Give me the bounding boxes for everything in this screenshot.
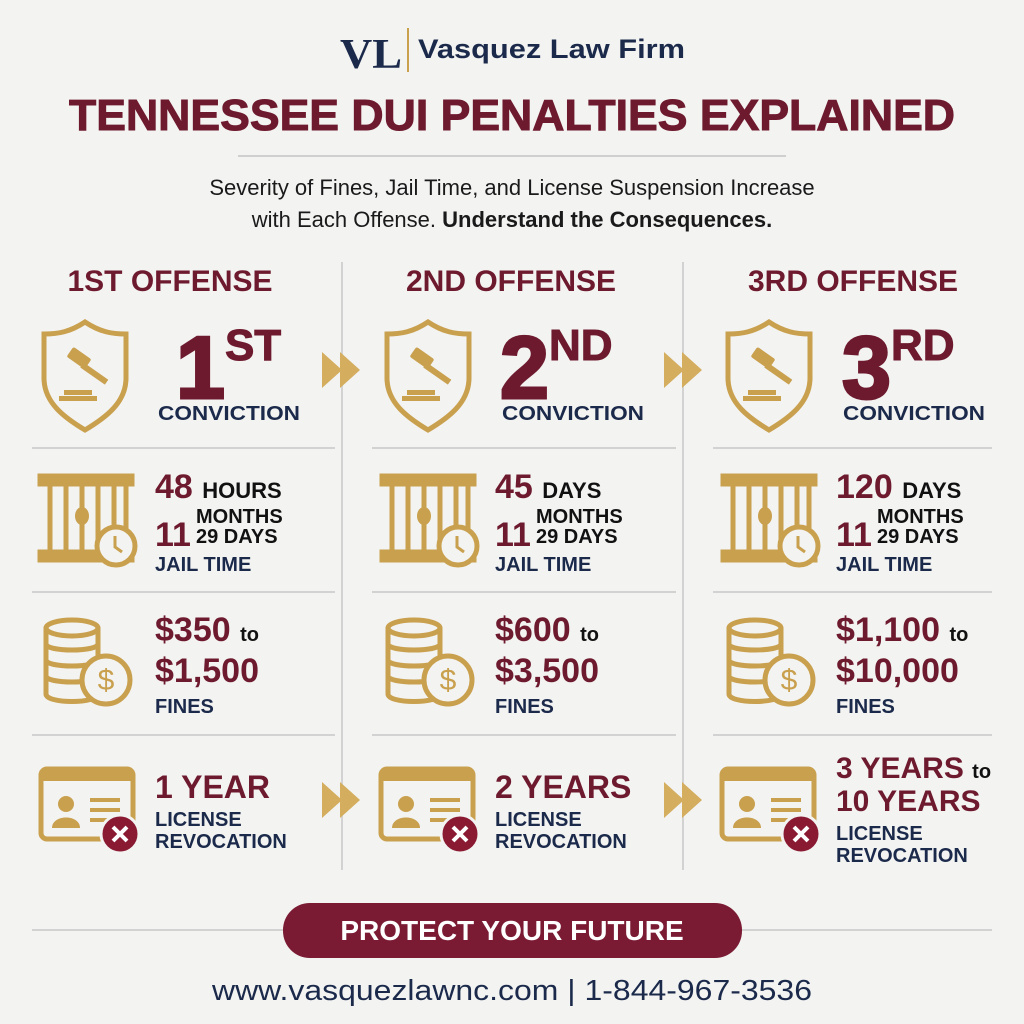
subtitle: with Each Offense. Understand the Consequences. [251, 207, 772, 232]
panel: 2nd offense: LICENSE [495, 809, 582, 831]
panel: 1st offense: LICENSE [155, 809, 242, 831]
panel: 3rd offense: RD [891, 321, 955, 370]
panel: 2nd offense: $600 to [495, 611, 599, 649]
panel: 3rd offense: 120 DAYS [836, 468, 961, 506]
call to action [32, 903, 992, 958]
panel: 1st offense: JAIL TIME [155, 554, 251, 576]
panel: 2nd offense: FINES [495, 696, 554, 718]
panel: 1st offense: CONVICTION [158, 403, 300, 425]
panel: 1st offense: 1ST OFFENSE [67, 265, 273, 298]
subtitle: Severity of Fines, Jail Time, and License Suspension Increase [209, 175, 815, 200]
panel: 3rd offense: CONVICTION [843, 403, 985, 425]
panel: 2nd offense: REVOCATION [495, 831, 627, 853]
panel: 3rd offense: 3 YEARS to [836, 752, 991, 785]
panel: 2nd offense: 2 YEARS [495, 769, 631, 805]
panel: 1st offense: FINES [155, 696, 214, 718]
panel: 3rd offense: REVOCATION [836, 845, 968, 867]
panel: 1st offense: $1,500 [155, 652, 259, 690]
contact: www.vasquezlawnc.com | 1-844-967-3536 [211, 975, 812, 1007]
panel: 3rd offense: $1,100 to [836, 611, 968, 649]
panel: 3rd offense: 3 [842, 318, 891, 417]
panel: 3rd offense [722, 265, 991, 867]
panel: 2nd offense: 2ND OFFENSE [406, 265, 616, 298]
panel: 1st offense: MONTHS [196, 506, 283, 528]
panel: 1st offense: 1 [176, 318, 225, 417]
arrows [322, 352, 702, 818]
panel: 3rd offense: 11 [836, 516, 872, 554]
panel: 2nd offense: 11 [495, 516, 531, 554]
panel: 2nd offense: MONTHS [536, 506, 623, 528]
panel: 3rd offense: 10 YEARS [836, 785, 981, 818]
column dividers [342, 262, 683, 870]
panel: 1st offense: 11 [155, 516, 191, 554]
panel: 2nd offense [381, 265, 644, 853]
panel: 1st offense: 1 YEAR [155, 769, 270, 805]
panel: 2nd offense: 45 DAYS [495, 468, 601, 506]
panel: 3rd offense: JAIL TIME [836, 554, 932, 576]
logo: VL [340, 32, 402, 78]
panel: 3rd offense: $10,000 [836, 652, 959, 690]
panel: 2nd offense: CONVICTION [502, 403, 644, 425]
panel: 3rd offense: 3RD OFFENSE [748, 265, 958, 298]
panel: 2nd offense: $3,500 [495, 652, 599, 690]
panel: 3rd offense: LICENSE [836, 823, 923, 845]
panel: 1st offense: 48 HOURS [155, 468, 282, 506]
panel: 3rd offense: 29 DAYS [877, 526, 959, 548]
panel: 2nd offense: JAIL TIME [495, 554, 591, 576]
panel: 2nd offense: ND [549, 321, 613, 370]
logo [340, 28, 685, 78]
logo: Vasquez Law Firm [418, 34, 685, 64]
panel: 1st offense: 29 DAYS [196, 526, 278, 548]
panel: 3rd offense: FINES [836, 696, 895, 718]
panel: 1st offense [40, 265, 300, 853]
panel: 1st offense: $350 to [155, 611, 259, 649]
panel: 1st offense: ST [225, 321, 281, 370]
panel: 3rd offense: MONTHS [877, 506, 964, 528]
panel: 1st offense: REVOCATION [155, 831, 287, 853]
title: TENNESSEE DUI PENALTIES EXPLAINED [69, 91, 955, 140]
subtitle [209, 175, 815, 232]
panel: 2nd offense: 2 [500, 318, 549, 417]
panel: 2nd offense: 29 DAYS [536, 526, 618, 548]
call to action: PROTECT YOUR FUTURE [340, 915, 684, 946]
